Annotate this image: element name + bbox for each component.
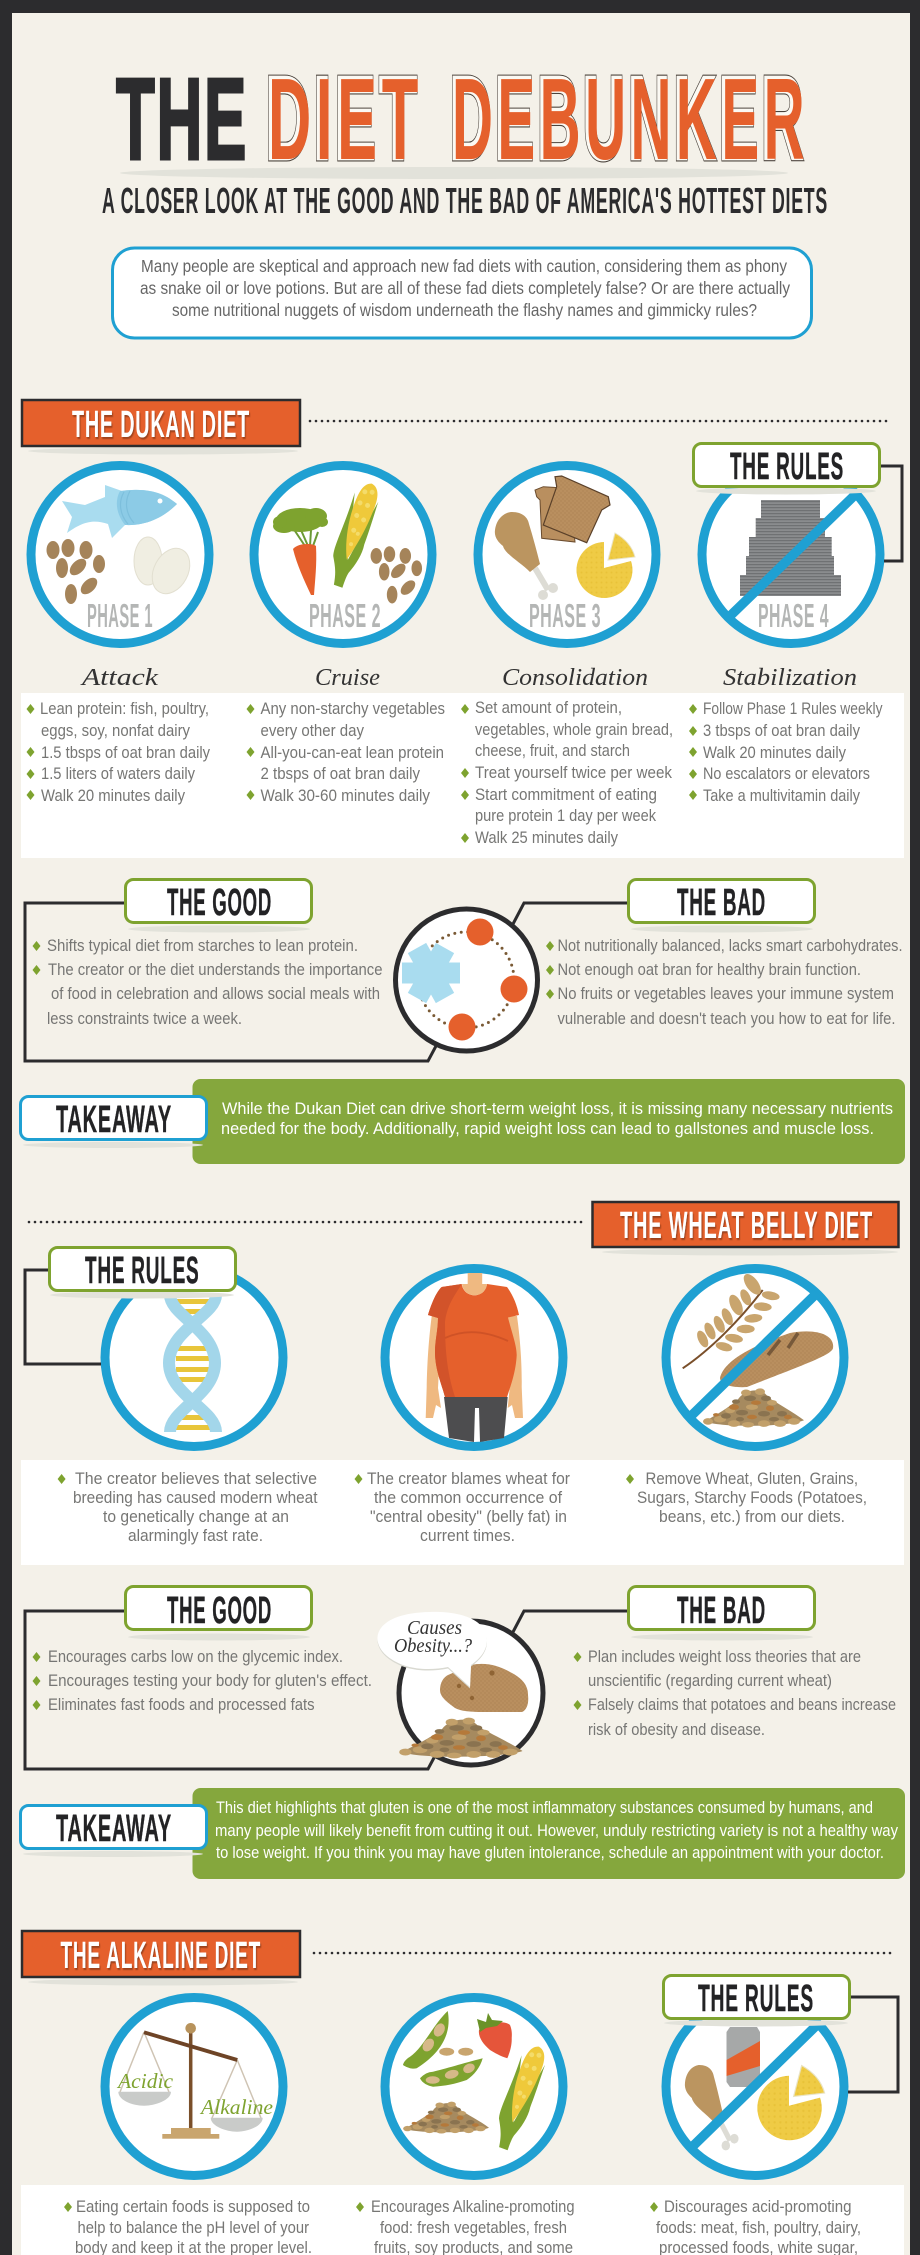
the good label: THE GOOD: [167, 882, 272, 924]
prohibition slash: [691, 2022, 820, 2148]
icon: orange dots: [448, 918, 528, 1040]
takeaway label: TAKEAWAY: [56, 1808, 172, 1850]
bullets: consolidation: pure protein 1 day per week: [475, 807, 657, 825]
text column 1: [58, 1470, 318, 1545]
bullets: consolidation: Walk 25 minutes daily: [475, 829, 619, 847]
text column 2: Encourages Alkaline-promoting: [371, 2198, 574, 2216]
scale circle: [105, 1998, 283, 2176]
the rules connector: [25, 1270, 101, 1364]
bullets: the good: Encourages carbs low on the glycemic index.: [48, 1648, 343, 1666]
title: [116, 53, 809, 184]
connector: good: [25, 903, 436, 1061]
the rules label: [664, 1976, 850, 2026]
intro text box: as snake oil or love potions. But are all of these fad diets completely false? Or are there actually: [140, 278, 790, 298]
title words: DIET DEBUNKER: [266, 53, 809, 184]
bullets: the good: less constraints twice a week.: [47, 1010, 242, 1028]
phase names: Cruise: [315, 665, 380, 691]
icon: grain pile: [399, 1718, 522, 1758]
text column 1: The creator believes that selective: [75, 1470, 317, 1488]
the bad label: [628, 880, 814, 932]
icon: blue star: [402, 948, 460, 998]
text column 1: to genetically change at an: [103, 1508, 289, 1526]
phase names: Stabilization: [723, 665, 857, 691]
panel: alkaline rules: [21, 2185, 904, 2255]
alkaline foods circle: [385, 1998, 563, 2176]
icon: chicken leg: [495, 512, 558, 600]
title words: DIET DEBUNKER: DIET: [266, 53, 421, 183]
bullets: the good: The creator or the diet understands the importance: [48, 961, 382, 979]
bullets: stabilization: Take a multivitamin daily: [703, 787, 861, 805]
bullets: the bad: Not enough oat bran for healthy brain function.: [558, 961, 861, 979]
connector: good: [25, 1611, 436, 1769]
bullets: attack: 1.5 liters of waters daily: [41, 765, 196, 783]
icon: beans: [46, 539, 105, 604]
bullets: attack: [26, 700, 211, 805]
bullets: consolidation: cheese, fruit, and starch: [475, 742, 630, 760]
bullets: attack: 1.5 tbsps of oat bran daily: [41, 744, 211, 762]
bullets: stabilization: Follow Phase 1 Rules weekly: [703, 700, 883, 718]
section header: The Alkaline Diet: THE ALKALINE DIET: [60, 1935, 261, 1977]
takeaway panel: [192, 1079, 905, 1164]
title shadow: [120, 167, 788, 179]
bullets: the good: [32, 937, 382, 1028]
text column 2: [354, 1470, 570, 1545]
icon: stairs: [740, 500, 841, 596]
section header: The Alkaline Diet: [22, 1931, 300, 1986]
icon: bread loaf: [720, 1331, 833, 1387]
text column 3: Sugars, Starchy Foods (Potatoes,: [637, 1489, 867, 1507]
takeaway label: [20, 1096, 206, 1148]
text column 2: the common occurrence of: [374, 1489, 562, 1507]
takeaway panel: While the Dukan Diet can drive short-term weight loss, it is missing many necessary nutrients: [222, 1099, 893, 1118]
the good label: [126, 880, 312, 932]
bullets: attack: Walk 20 minutes daily: [41, 787, 186, 805]
phase 2 circle: [254, 466, 432, 644]
acid foods circle: [666, 1998, 844, 2176]
icon: corn: [489, 2042, 551, 2153]
intro text box: some nutritional nuggets of wisdom underneath the flashy names and gimmicky rules?: [172, 300, 757, 320]
bullets: the good: [32, 1648, 372, 1714]
the rules label: THE RULES: [698, 1978, 814, 2020]
phase 4 circle: PHASE 4: [758, 597, 829, 634]
bullets: stabilization: [689, 700, 883, 805]
bullets: the bad: [546, 937, 902, 1028]
section header: The Dukan Diet: THE DUKAN DIET: [72, 404, 250, 446]
phase 4 circle: [702, 466, 880, 644]
wheat circle: [666, 1268, 844, 1446]
takeaway panel: needed for the body. Additionally, rapid weight loss can lead to gallstones and muscle loss.: [221, 1119, 874, 1138]
bullets: the bad: risk of obesity and disease.: [588, 1721, 765, 1739]
connector: bad: [513, 903, 628, 924]
text column 3: [626, 1470, 867, 1526]
dna circle: [105, 1268, 283, 1446]
icon: grain pile: [403, 2102, 489, 2134]
connector: bad: [513, 1611, 628, 1632]
phase 3 circle: [478, 466, 656, 644]
bullets: the bad: unscientific (regarding current wheat): [588, 1672, 832, 1690]
bullets: stabilization: No escalators or elevators: [703, 765, 870, 783]
bullets: cruise: [246, 700, 445, 805]
bullets: consolidation: Treat yourself twice per week: [475, 764, 673, 782]
text column 2: The creator blames wheat for: [367, 1470, 570, 1488]
bullets: the good: Shifts typical diet from starches to lean protein.: [47, 937, 358, 955]
center circle: potato and grain: [399, 1621, 543, 1765]
bullets: the good: Encourages testing your body for gluten's effect.: [48, 1672, 372, 1690]
label: acidic: Acidic: [116, 2069, 174, 2093]
bullets: consolidation: vegetables, whole grain bread,: [475, 721, 673, 739]
phase 1 circle: PHASE 1: [87, 597, 153, 634]
phase 3 circle: PHASE 3: [529, 597, 601, 634]
text column 1: help to balance the pH level of your: [78, 2219, 309, 2237]
takeaway label: [20, 1806, 206, 1857]
title words: DIET DEBUNKER: DIET: [268, 54, 423, 184]
icon: cheese: [757, 2065, 825, 2140]
intro text box: Many people are skeptical and approach new fad diets with caution, considering them as phony: [141, 256, 787, 276]
speech bubble: Causes: [407, 1617, 462, 1639]
icon: soda can: [726, 2027, 760, 2087]
panel: phase rules: [21, 693, 904, 858]
panel: wheat belly rules: [21, 1460, 904, 1565]
bullets: consolidation: Set amount of protein,: [475, 699, 622, 717]
icon: beans: [439, 2048, 473, 2056]
bullets: consolidation: [461, 699, 673, 847]
bullets: stabilization: Walk 20 minutes daily: [703, 744, 847, 762]
icon: fish: [62, 485, 177, 538]
text column 2: current times.: [420, 1527, 515, 1545]
phase names: [80, 665, 857, 691]
speech bubble: Obesity...?: [394, 1635, 472, 1657]
icon: strawberry: [477, 2013, 512, 2058]
text column 1: Eating certain foods is supposed to: [76, 2198, 310, 2216]
phase names: Consolidation: [502, 665, 648, 691]
icon: beans: [371, 546, 422, 603]
prohibition slash: [729, 492, 858, 617]
text column 3: Remove Wheat, Gluten, Grains,: [646, 1470, 858, 1488]
the rules label: [50, 1248, 236, 1298]
icon: wheat: [683, 1271, 780, 1368]
icon: carrot: [273, 508, 328, 595]
icon: balance scale: [118, 2023, 263, 2139]
the bad label: THE BAD: [677, 1590, 766, 1632]
text column 2: [356, 2198, 574, 2255]
bullets: cruise: All-you-can-eat lean protein: [260, 744, 444, 762]
phase 2 circle: PHASE 2: [309, 597, 381, 634]
text column 1: alarmingly fast rate.: [128, 1527, 263, 1545]
text column 1: [64, 2198, 312, 2255]
icon: bread: [535, 476, 610, 543]
phase names: Attack: [80, 665, 158, 691]
icon: pea pod: [403, 2011, 483, 2087]
icon: chicken leg: [685, 2065, 739, 2150]
bullets: cruise: every other day: [260, 722, 365, 740]
bullets: the good: of food in celebration and allows social meals with: [51, 985, 380, 1003]
person circle: [385, 1268, 563, 1446]
bullets: cruise: 2 tbsps of oat bran daily: [260, 765, 421, 783]
the bad label: [628, 1586, 814, 1640]
text column 3: [650, 2198, 861, 2255]
the good label: [126, 1586, 312, 1640]
icon: cheese: [576, 533, 635, 598]
prohibition slash: [690, 1293, 817, 1417]
bullets: the good: Eliminates fast foods and processed fats: [48, 1696, 314, 1714]
bullets: stabilization: 3 tbsps of oat bran daily: [703, 722, 861, 740]
text column 3: Discourages acid-promoting: [664, 2198, 852, 2216]
bullets: consolidation: Start commitment of eating: [475, 786, 657, 804]
icon: grain pile: [703, 1388, 804, 1427]
label: alkaline: Alkaline: [199, 2095, 273, 2119]
the rules label: [694, 444, 880, 494]
the rules label: THE RULES: [85, 1250, 200, 1292]
title word: THE: THE: [116, 54, 248, 184]
text column 2: food: fresh vegetables, fresh: [380, 2219, 567, 2237]
section header: The Wheat Belly Diet: [592, 1202, 898, 1256]
title words: DIET DEBUNKER: DIET: [266, 53, 421, 183]
text column 3: beans, etc.) from our diets.: [659, 1508, 845, 1526]
icon: potato: [440, 1664, 528, 1712]
the good label: THE GOOD: [167, 1590, 272, 1632]
bullets: attack: eggs, soy, nonfat dairy: [41, 722, 191, 740]
icon: corn: [323, 479, 384, 590]
bullets: the bad: Plan includes weight loss theories that are: [588, 1648, 861, 1666]
the rules connector: [848, 1997, 898, 2092]
takeaway panel: [192, 1788, 905, 1879]
icon: eggs: [134, 537, 197, 600]
takeaway label: TAKEAWAY: [56, 1099, 172, 1141]
intro text box: [112, 248, 812, 338]
section header: The Dukan Diet: [22, 400, 300, 454]
bullets: cruise: Any non-starchy vegetables: [260, 700, 445, 718]
bullets: attack: Lean protein: fish, poultry,: [40, 700, 209, 718]
bullets: cruise: Walk 30-60 minutes daily: [260, 787, 431, 805]
bullets: the bad: [574, 1648, 896, 1739]
text column 1: breeding has caused modern wheat: [73, 1489, 318, 1507]
the bad label: THE BAD: [677, 882, 766, 924]
icon: dna: [169, 1295, 216, 1432]
icon: person: [426, 1273, 523, 1442]
the rules connector: [880, 466, 902, 561]
center circle: dukan plate: [396, 909, 538, 1051]
text column 3: foods: meat, fish, poultry, dairy,: [656, 2219, 861, 2237]
text column 2: "central obesity" (belly fat) in: [370, 1508, 567, 1526]
phase 1 circle: [31, 466, 209, 644]
speech bubble: [377, 1612, 487, 1688]
